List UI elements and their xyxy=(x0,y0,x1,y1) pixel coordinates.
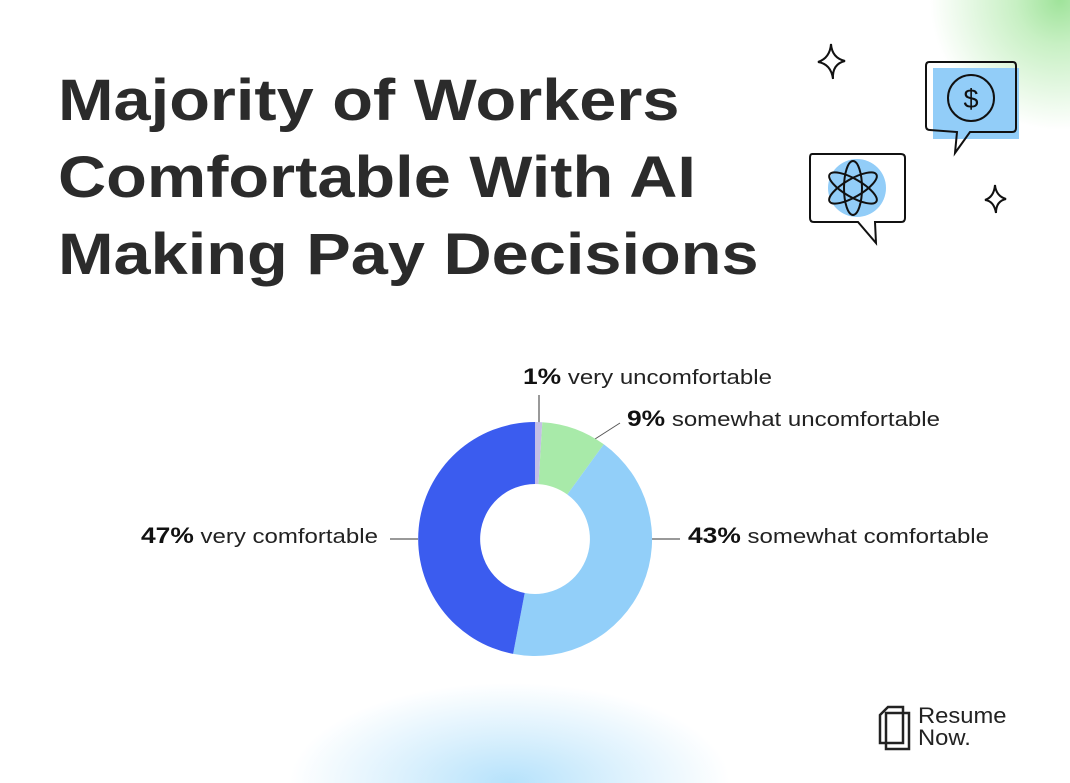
title: Making Pay Decisions xyxy=(58,222,759,287)
logo: Resume xyxy=(918,703,1006,728)
title: Comfortable With AI xyxy=(58,145,696,210)
icon: dollar bubble xyxy=(926,62,1019,153)
logo xyxy=(878,703,1006,750)
label: 43%: 43% somewhat comfortable xyxy=(688,523,989,548)
title: Majority of Workers xyxy=(58,68,679,133)
label: 1%: 1% very uncomfortable xyxy=(523,364,772,389)
title xyxy=(58,68,759,287)
label: 9%: 9% somewhat uncomfortable xyxy=(627,406,940,431)
icon: sparkle bottom xyxy=(985,185,1006,213)
icon: atom bubble xyxy=(810,154,905,243)
icon: sparkle top xyxy=(818,44,845,79)
logo: Now. xyxy=(918,725,971,750)
label: 47%: 47% very comfortable xyxy=(141,523,378,548)
icons illustration xyxy=(809,44,1019,246)
icon: dollar bubble: $ xyxy=(963,84,979,114)
